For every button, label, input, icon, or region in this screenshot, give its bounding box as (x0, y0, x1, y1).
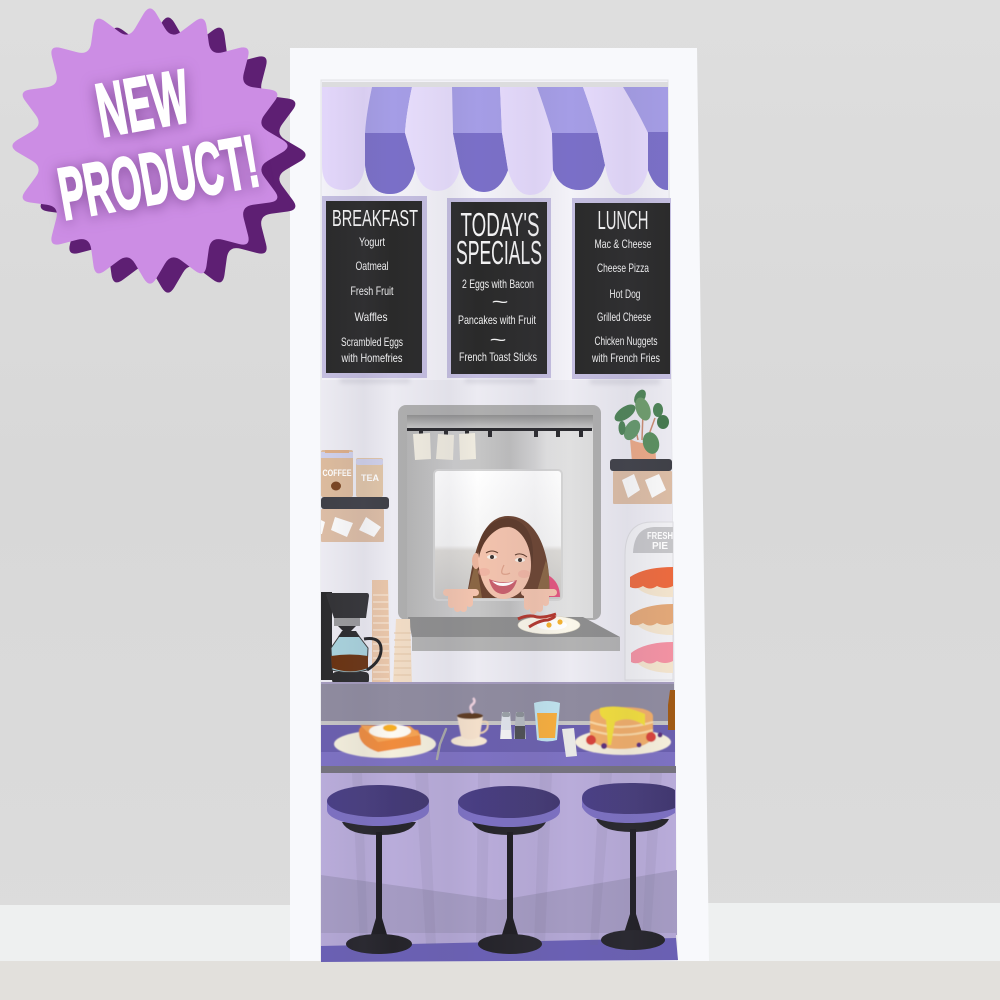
baseboards (0, 903, 1000, 962)
service window (398, 405, 620, 651)
curtain folds (352, 773, 662, 945)
dark shelf (321, 497, 389, 509)
pink pie (631, 642, 673, 673)
menu board: today's specials (447, 198, 551, 378)
menu board: today's specials: SPECIALS (456, 234, 542, 271)
tea tin: TEA (361, 473, 380, 483)
pink background object (546, 575, 560, 597)
menu board: breakfast: Scrambled Eggs (341, 335, 403, 349)
menu board: lunch: Cheese Pizza (597, 261, 649, 275)
hanging mugs (622, 474, 666, 498)
order tickets (413, 433, 476, 460)
mug board (321, 509, 384, 542)
curtain fabric (321, 80, 677, 961)
badge text (52, 54, 265, 236)
awning (322, 87, 668, 195)
fork (437, 729, 446, 759)
menu board: lunch: with French Fries (591, 351, 660, 365)
fresh pie display case: FRESH (647, 531, 673, 542)
menu board: lunch: Mac & Cheese (594, 237, 652, 251)
badge text: PRODUCT! (52, 119, 265, 236)
menu board: breakfast: Fresh Fruit (350, 284, 394, 298)
terracotta pot (630, 439, 656, 464)
steel counter ledge (408, 617, 620, 651)
menu board: today's specials: 2 Eggs with Bacon (462, 277, 534, 291)
new product starburst badge (12, 8, 306, 293)
counter front (321, 773, 676, 945)
badge main star (12, 8, 288, 284)
fresh pie display case (625, 522, 673, 680)
hanging mugs (321, 517, 381, 537)
stool 1 (327, 785, 429, 954)
steel surround (398, 405, 601, 620)
girl peeking through window (466, 516, 549, 599)
stool 2 (458, 786, 560, 954)
menu board: lunch: Chicken Nuggets (594, 334, 658, 348)
window opening photo (434, 470, 562, 600)
fabric fold shading (321, 87, 677, 960)
board drop shadows (340, 378, 660, 384)
toast and egg plate (334, 724, 436, 758)
coffee tin: COFFEE (322, 468, 352, 478)
golden pie (630, 604, 673, 635)
plant shelf (610, 388, 672, 504)
girl's hands (443, 589, 557, 614)
back wall panel (321, 682, 674, 721)
ticket rail (407, 428, 592, 437)
badge shadow star (30, 17, 306, 293)
menu board: today's specials: French Toast Sticks (459, 350, 537, 364)
menu board: lunch: Grilled Cheese (597, 310, 651, 324)
red pie (630, 567, 673, 597)
syrup bottle (668, 690, 675, 730)
floor strip (321, 938, 678, 962)
badge text: NEW (90, 54, 196, 154)
menu board: today's specials: TODAY'S (460, 206, 540, 243)
door curtain (321, 80, 678, 962)
coffee machine (321, 592, 381, 684)
diner counter (321, 682, 678, 962)
menu board: today's specials: Pancakes with Fruit (458, 313, 536, 327)
menu board: today's specials: ~ (490, 330, 506, 350)
menu board: breakfast: Waffles (354, 310, 388, 324)
glass of orange juice (534, 701, 560, 742)
menu board: breakfast: Yogurt (359, 235, 385, 249)
menu board: lunch: Hot Dog (610, 287, 640, 301)
coffee cup with steam (451, 698, 488, 746)
stacked paper cups (372, 580, 412, 685)
glass carafe (331, 631, 381, 672)
fresh pie display case: PIE (652, 541, 668, 552)
stack of pancakes plate (575, 706, 671, 755)
purple countertop (321, 725, 675, 753)
salt and pepper shakers (500, 712, 526, 739)
menu board: today's specials: ~ (492, 292, 508, 312)
menu board: breakfast: with Homefries (341, 351, 402, 365)
stool 3 (582, 783, 675, 950)
door frame (290, 48, 709, 961)
plant leaves (612, 388, 669, 456)
menu board: lunch: LUNCH (598, 205, 648, 235)
menu board: breakfast: BREAKFAST (332, 205, 418, 231)
mug board (613, 471, 672, 504)
menu board: breakfast: Oatmeal (356, 259, 388, 273)
curtain rod pocket (322, 82, 668, 87)
menu board: breakfast (322, 196, 427, 378)
dark shelf (610, 459, 672, 471)
shelf with coffee and tea tins (321, 450, 389, 542)
plate of bacon and eggs (518, 614, 580, 634)
menu board: lunch (572, 198, 671, 379)
wrapped cutlery napkin (562, 728, 577, 757)
floor (0, 961, 1000, 1000)
